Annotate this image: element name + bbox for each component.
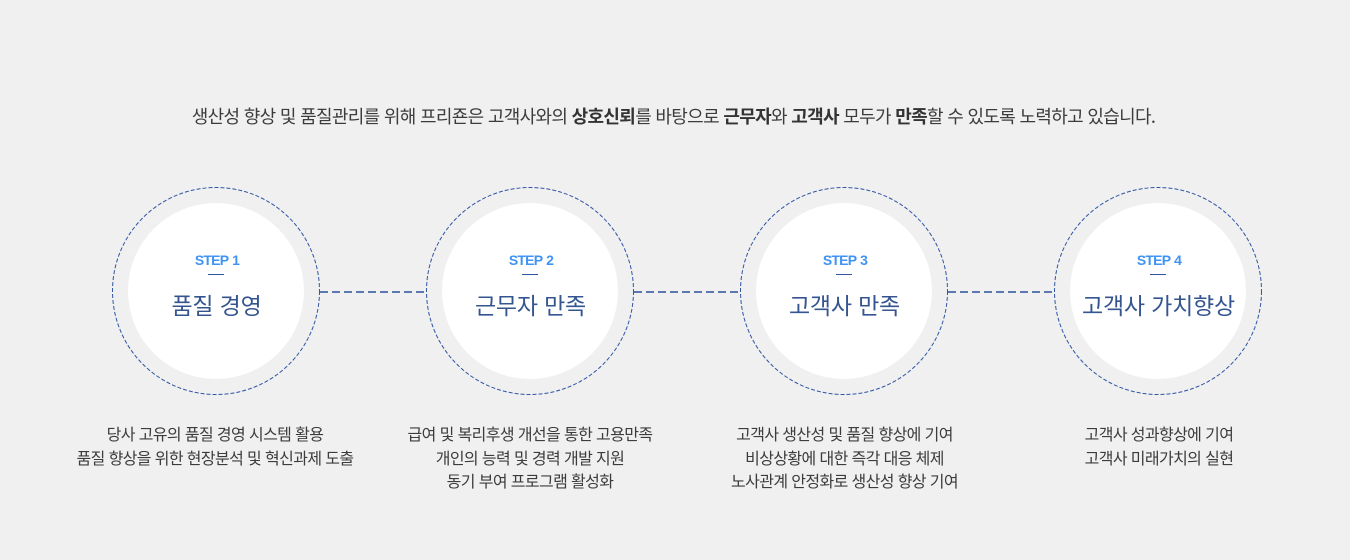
step 2 circle: STEP 2 xyxy=(509,252,553,268)
step 3 description xyxy=(731,421,958,492)
step 1 circle: 품질 경영 xyxy=(171,287,262,321)
step 4 circle: STEP 4 xyxy=(1137,252,1181,268)
step 3 circle xyxy=(740,187,948,395)
step 3 description: 비상상황에 대한 즉각 대응 체제 xyxy=(745,444,944,468)
step 1 circle: STEP 1 xyxy=(195,252,239,268)
step 4 circle: 고객사 가치향상 xyxy=(1082,287,1235,321)
step 1 description xyxy=(77,421,354,468)
step 2 description: 개인의 능력 및 경력 개발 지원 xyxy=(436,444,624,468)
step 2 circle xyxy=(426,187,634,395)
connector: step 3 to 4 xyxy=(948,291,1052,293)
step 3 description: 고객사 생산성 및 품질 향상에 기여 xyxy=(736,421,953,445)
intro text: 생산성 향상 및 품질관리를 위해 프리죤은 고객사와의 상호신뢰를 바탕으로 근무자와 고객사 모두가 만족할 수 있도록 노력하고 있습니다. xyxy=(192,103,1155,129)
step 3 description: 노사관계 안정화로 생산성 향상 기여 xyxy=(731,468,958,492)
step 4 description: 고객사 성과향상에 기여 xyxy=(1085,421,1233,445)
step 1 description: 품질 향상을 위한 현장분석 및 혁신과제 도출 xyxy=(77,444,353,468)
connector: step 1 to 2 xyxy=(320,291,424,293)
step 4 description xyxy=(1085,421,1233,468)
step 2 description xyxy=(408,421,652,492)
step 1 description: 당사 고유의 품질 경영 시스템 활용 xyxy=(107,421,323,445)
step 3 circle: STEP 3 xyxy=(823,252,867,268)
step 4 circle xyxy=(1054,187,1262,395)
step 2 circle: 근무자 만족 xyxy=(475,287,586,321)
connector: step 2 to 3 xyxy=(634,291,738,293)
step 1 circle xyxy=(112,187,320,395)
step 2 description: 급여 및 복리후생 개선을 통한 고용만족 xyxy=(408,421,652,445)
step 4 description: 고객사 미래가치의 실현 xyxy=(1085,444,1233,468)
step 3 circle: 고객사 만족 xyxy=(789,287,900,321)
step 2 description: 동기 부여 프로그램 활성화 xyxy=(447,468,613,492)
